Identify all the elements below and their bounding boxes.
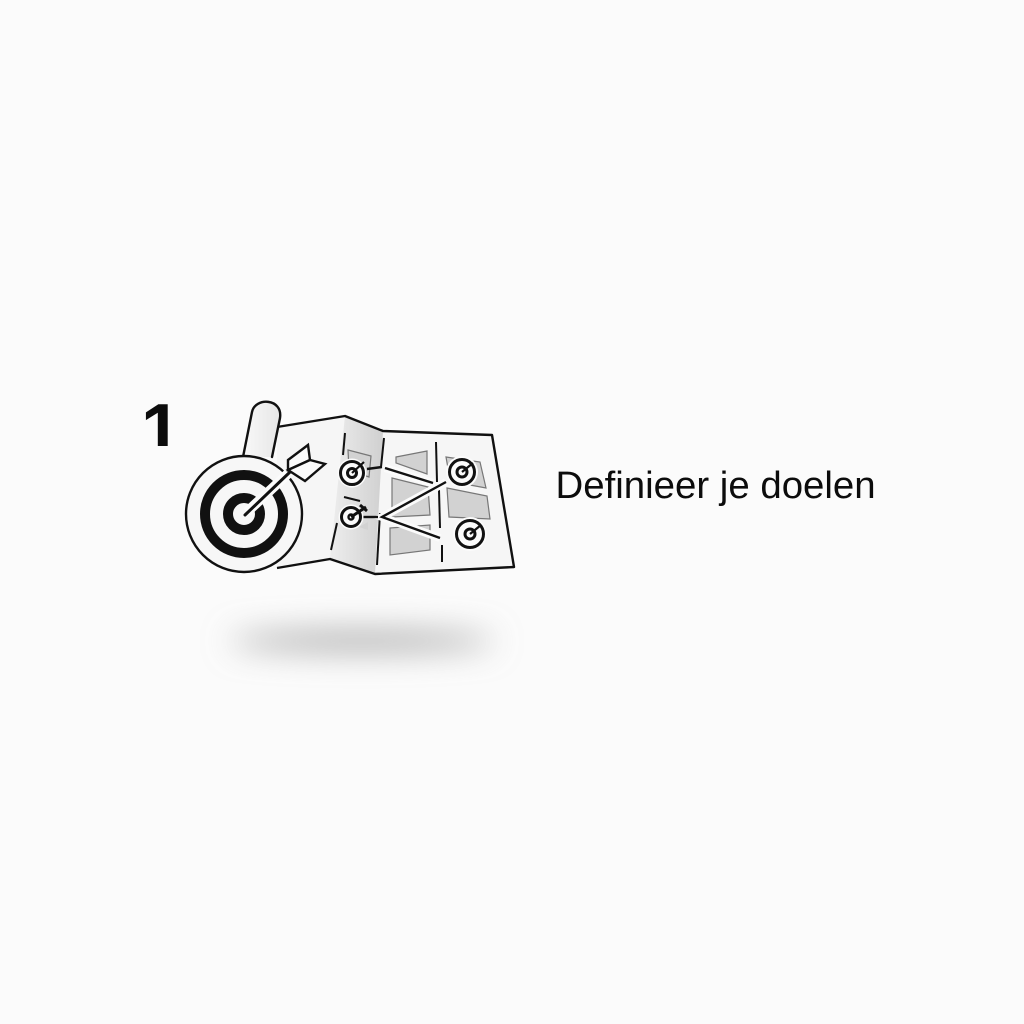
step number: 1 [141,390,181,470]
map grey blocks [348,450,490,555]
route lines [382,468,446,538]
label text: Definieer je doelen [556,464,876,507]
target inner ring [228,498,260,530]
arrow fletching [288,445,325,481]
map marker: top left [338,458,366,488]
map fold lines [331,433,442,565]
map sheet [277,416,514,574]
map fold shading [330,416,383,574]
arrow shaft [245,472,290,515]
arrow gap [247,468,294,512]
icon: folded map [277,416,514,574]
target black ring [205,475,283,553]
map outline [277,416,514,574]
icon: scroll roll [243,402,280,457]
icon: target with arrow [186,445,325,572]
map marker: lower right [453,517,487,551]
map marker: lower left [338,504,367,530]
map marker: top right [446,456,478,488]
ground shadow [230,632,494,650]
target outer ring [186,456,302,572]
